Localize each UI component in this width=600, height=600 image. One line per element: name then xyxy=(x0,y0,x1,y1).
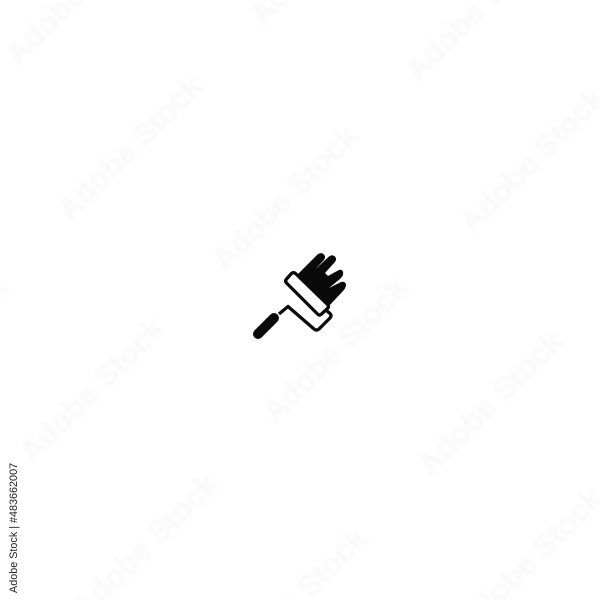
paint drips xyxy=(298,253,346,307)
watermark layer: Adobe Stock xyxy=(206,118,365,277)
roller sleeve xyxy=(286,273,328,315)
vertical credit text: Adobe Stock | #483662007 xyxy=(8,463,20,593)
roller handle xyxy=(258,318,274,334)
watermark layer: Adobe Stock xyxy=(411,323,570,482)
watermark layer: Adobe Stock xyxy=(13,310,172,469)
roller frame xyxy=(279,306,331,330)
watermark layer: Adobe Stock xyxy=(51,68,210,227)
watermark layer: Adobe Stock xyxy=(256,270,415,429)
